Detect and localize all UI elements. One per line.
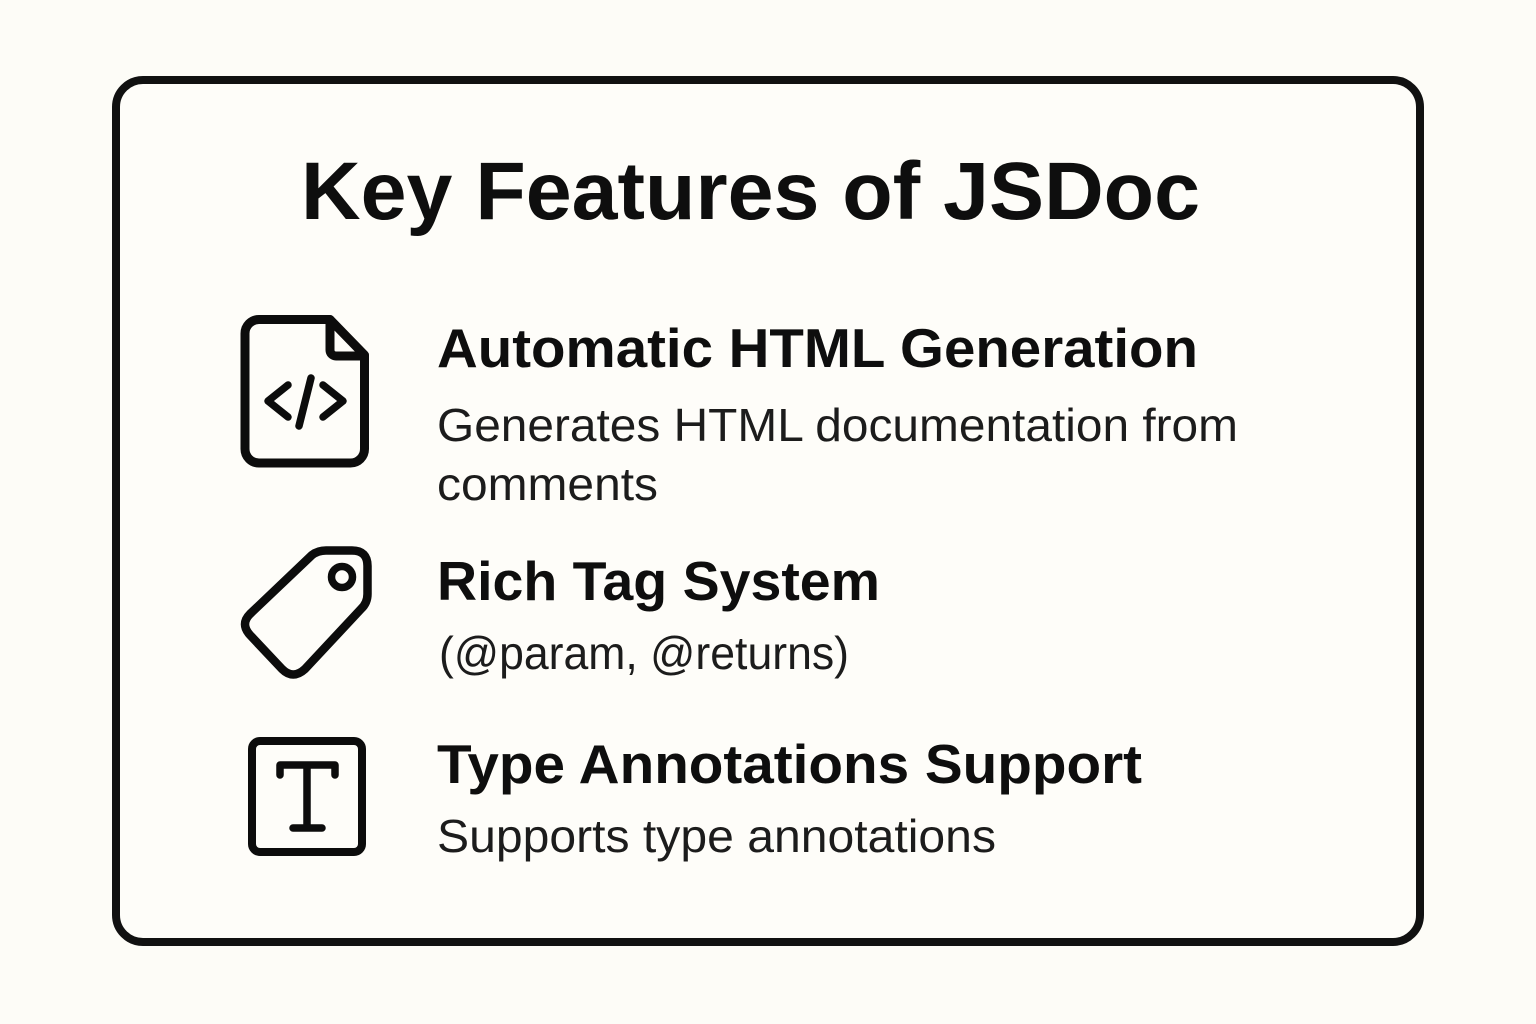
- text: rich tag description: (@param, @returns): [439, 627, 849, 679]
- text: type annotations description: Supports type annotations: [437, 810, 996, 862]
- text: automatic html description: Generates HTML documentation from: [437, 399, 1238, 451]
- title: Key Features of JSDoc: [301, 146, 1200, 237]
- icon: code document: [245, 320, 364, 463]
- text: automatic html description: [437, 399, 1238, 510]
- panel: key features card: [116, 80, 1420, 942]
- icon: type box: [252, 741, 362, 852]
- icon: tag: [245, 550, 368, 674]
- text: automatic html description: comments: [437, 458, 658, 510]
- heading: automatic html generation: Automatic HTML Generation: [437, 317, 1198, 379]
- heading: type annotations support: Type Annotations Support: [437, 733, 1142, 795]
- heading: rich tag system: Rich Tag System: [437, 550, 880, 612]
